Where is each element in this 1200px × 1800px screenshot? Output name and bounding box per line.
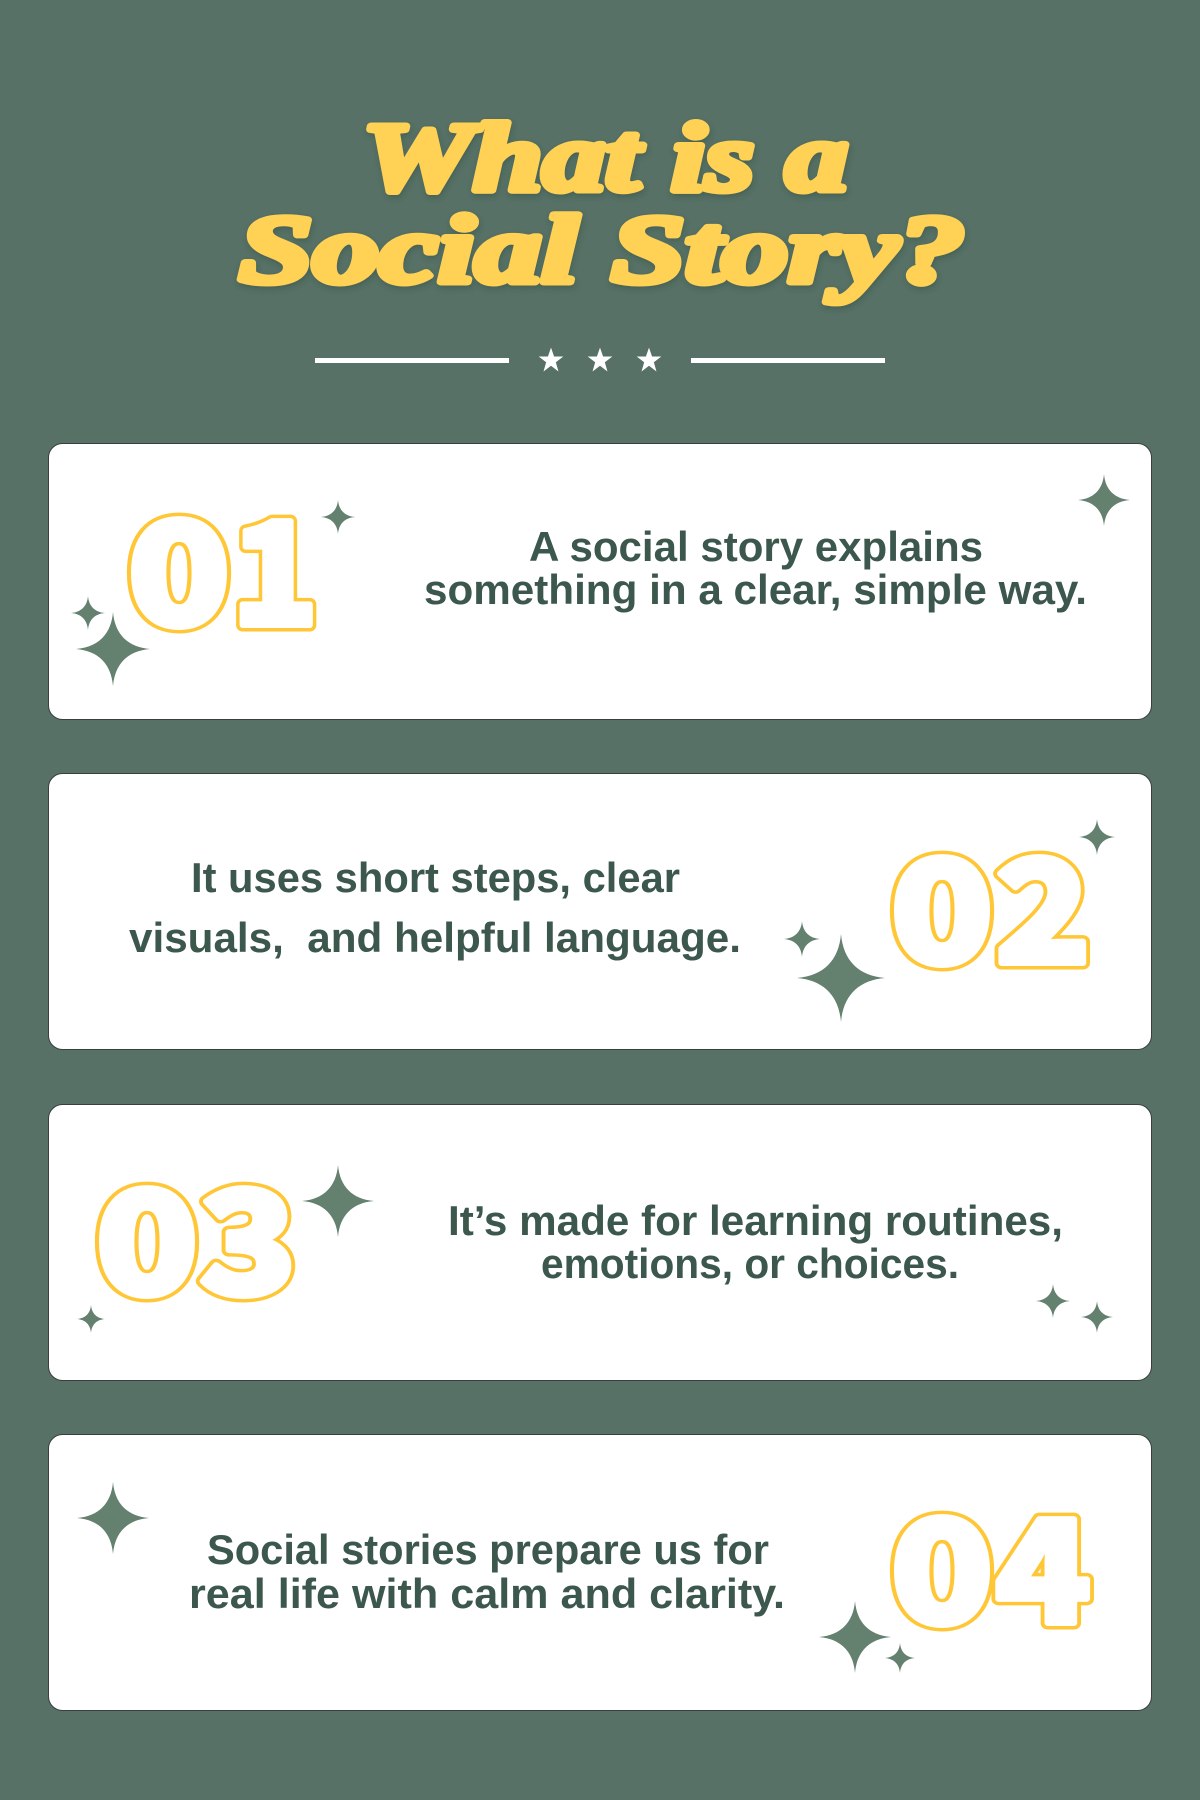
card 4 text	[189, 1526, 785, 1617]
number 04: 4	[995, 1458, 1091, 1665]
title	[239, 104, 965, 303]
number 04: 0	[891, 1458, 993, 1665]
number 03: 0	[96, 1129, 198, 1336]
sparkles	[784, 819, 1115, 1022]
card 3 text: emotions, or choices.	[541, 1240, 959, 1287]
number 03	[96, 1128, 297, 1336]
number 03: 0	[96, 1129, 198, 1336]
card 4 text: real life with calm and clarity.	[189, 1570, 785, 1617]
number 02: 2	[995, 798, 1091, 1005]
number 01: 1	[231, 460, 319, 667]
card 3 text	[448, 1197, 1063, 1287]
panel: card 1	[48, 444, 1152, 720]
title: Social Story?	[239, 196, 965, 303]
card 4 text: Social stories prepare us for	[207, 1526, 769, 1573]
card 1 text	[424, 523, 1087, 613]
card 1 text: A social story explains	[529, 523, 983, 570]
number 02: 0	[891, 798, 993, 1005]
number 02	[891, 798, 1091, 1005]
number 01	[128, 460, 319, 667]
card 2 text	[129, 854, 741, 961]
number 01: 0	[128, 460, 230, 667]
panel: card 4	[48, 1434, 1152, 1710]
card 3 text: It’s made for learning routines,	[448, 1197, 1063, 1244]
number 04	[891, 1458, 1091, 1665]
number 01: 1	[231, 460, 319, 667]
sparkles	[77, 1165, 1113, 1333]
card 2 text: It uses short steps, clear	[191, 854, 680, 901]
card 1 text: something in a clear, simple way.	[424, 566, 1087, 613]
panel: card 2	[48, 774, 1152, 1050]
number 04: 0	[891, 1458, 993, 1665]
number 03: 3	[199, 1128, 297, 1335]
sparkles	[71, 474, 1130, 686]
sparkles	[77, 1482, 915, 1673]
number 03: 3	[199, 1128, 297, 1335]
divider with three stars	[315, 348, 885, 371]
panel: card 3	[48, 1104, 1152, 1380]
number 01: 0	[128, 460, 230, 667]
number 02: 2	[995, 798, 1091, 1005]
card 2 text: visuals, and helpful language.	[129, 914, 741, 961]
title: What is a	[362, 104, 848, 211]
number 04: 4	[995, 1458, 1091, 1665]
number 02: 0	[891, 798, 993, 1005]
